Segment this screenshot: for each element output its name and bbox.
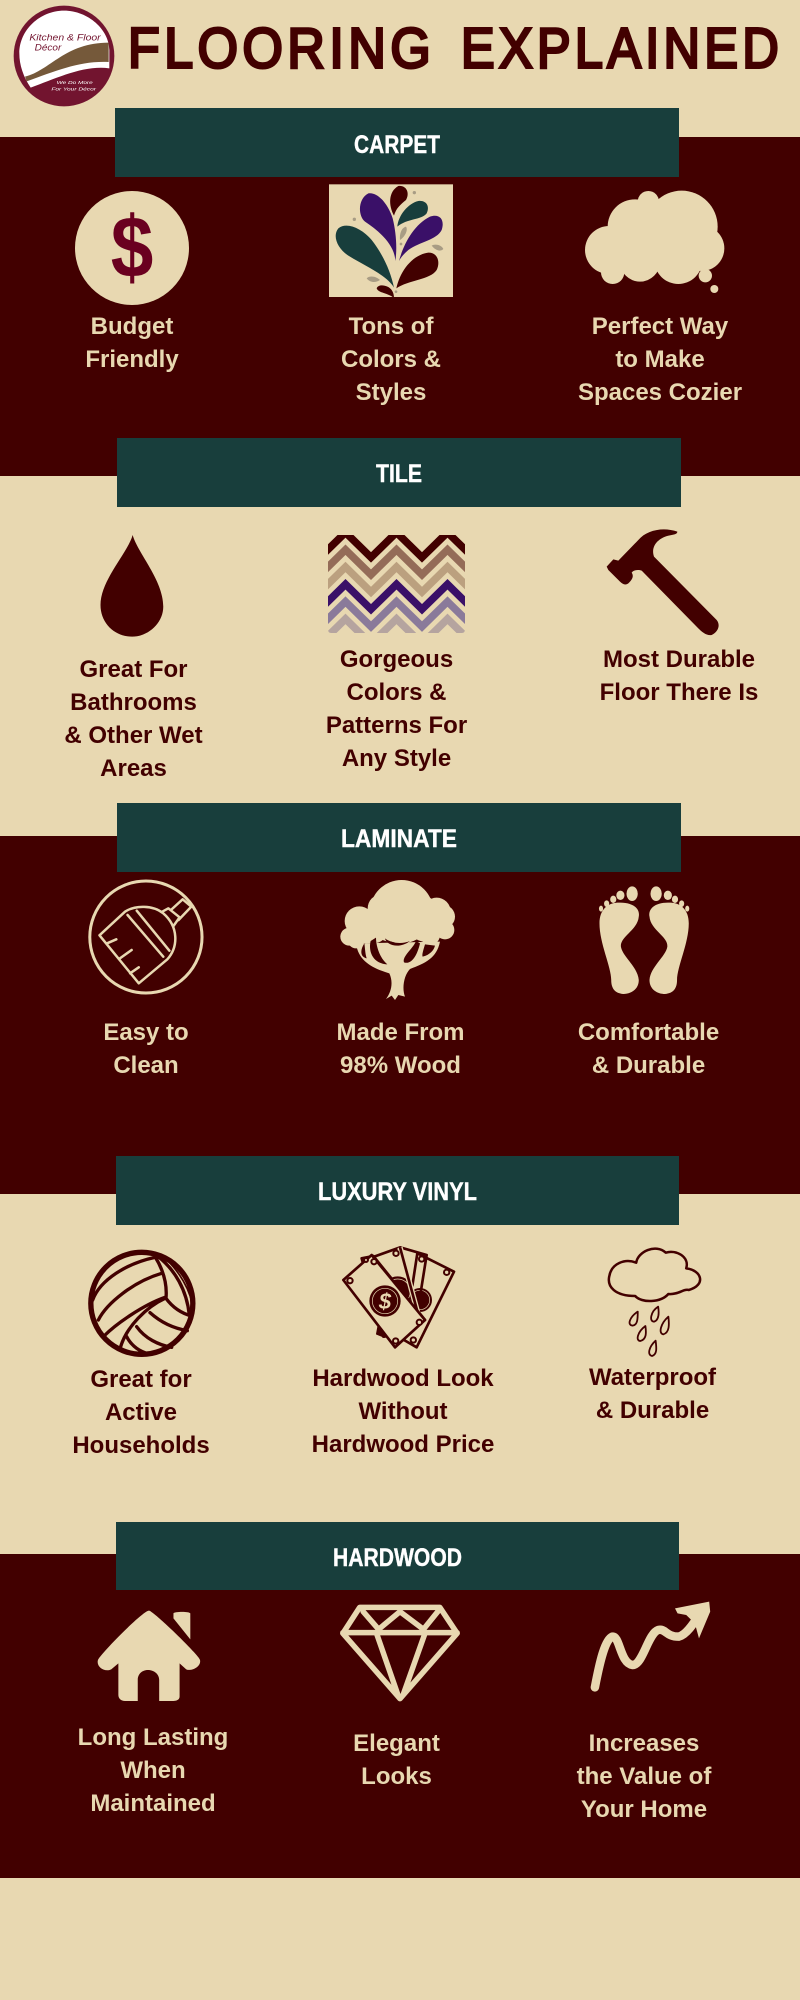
- label: colors and styles: Colors &: [341, 346, 441, 373]
- title: [128, 16, 783, 80]
- label: active households: Great for: [90, 1366, 192, 1393]
- label: elegant: Looks: [361, 1763, 432, 1790]
- logo: Kitchen & Floor Decor: Décor: [35, 43, 62, 53]
- heading: carpet: [115, 108, 679, 177]
- label: waterproof: & Durable: [596, 1397, 709, 1424]
- heading: laminate: [117, 803, 681, 872]
- label: wet areas: Areas: [100, 755, 167, 782]
- label: home value: the Value of: [577, 1763, 712, 1790]
- icon: fan of banknotes: [343, 1247, 454, 1347]
- icon: tree: [340, 880, 455, 1000]
- icon: rain cloud: [609, 1249, 700, 1356]
- icon: colour splash: [329, 184, 453, 298]
- icon: rising arrow: [595, 1602, 710, 1687]
- label: long lasting: Long Lasting: [78, 1724, 228, 1751]
- title: EXPLAINED: [461, 17, 783, 80]
- logo: Kitchen & Floor Decor: For Your Décor: [51, 86, 96, 92]
- label: wet areas: Great For: [79, 656, 188, 683]
- label: hardwood look: Hardwood Price: [312, 1431, 494, 1458]
- heading: hardwood: HARDWOOD: [333, 1544, 462, 1572]
- label: budget friendly: Budget: [91, 313, 173, 340]
- label: easy to clean: Clean: [113, 1052, 179, 1079]
- icon: hammer: [607, 529, 719, 635]
- heading: luxury vinyl: LUXURY VINYL: [318, 1178, 477, 1206]
- label: easy to clean: Easy to: [103, 1019, 189, 1046]
- heading: tile: TILE: [376, 460, 422, 488]
- label: home value: Increases: [589, 1730, 699, 1757]
- panel: hardwood: [0, 1522, 800, 1878]
- icon: broom in circle: [90, 881, 202, 993]
- heading: laminate: LAMINATE: [341, 825, 457, 853]
- icon: chevron tile pattern: [328, 535, 465, 633]
- heading: hardwood: [116, 1522, 679, 1590]
- panel: luxury vinyl: [72, 1156, 717, 1459]
- heading: luxury vinyl: [116, 1156, 679, 1225]
- label: patterns: Any Style: [342, 745, 451, 772]
- label: active households: Active: [105, 1399, 177, 1426]
- label: active households: Households: [72, 1432, 210, 1459]
- label: patterns: Gorgeous: [340, 646, 453, 673]
- label: budget friendly: Friendly: [85, 346, 179, 373]
- logo: Kitchen & Floor Decor: We Do More: [57, 80, 93, 86]
- label: cozier spaces: Spaces Cozier: [578, 379, 742, 406]
- label: colors and styles: Styles: [356, 379, 426, 406]
- heading: tile: [117, 438, 681, 507]
- icon: volleyball: [91, 1252, 193, 1354]
- icon: fan of banknotes: $: [378, 1289, 392, 1314]
- label: long lasting: When: [120, 1757, 186, 1784]
- logo: Kitchen & Floor Decor: [14, 6, 114, 106]
- icon: water drop: [101, 535, 163, 637]
- label: wood content: 98% Wood: [340, 1052, 461, 1079]
- icon: house: [98, 1611, 200, 1701]
- panel: laminate: [0, 803, 800, 1194]
- label: wet areas: & Other Wet: [64, 722, 203, 749]
- icon: dollar coin: $: [111, 199, 153, 296]
- label: elegant: Elegant: [353, 1730, 440, 1757]
- panel: carpet: [0, 108, 800, 476]
- label: comfortable: Comfortable: [578, 1019, 719, 1046]
- label: cozier spaces: Perfect Way: [592, 313, 729, 340]
- icon: diamond: [343, 1607, 457, 1699]
- label: hardwood look: Hardwood Look: [312, 1365, 494, 1392]
- label: long lasting: Maintained: [90, 1790, 216, 1817]
- label: colors and styles: Tons of: [349, 313, 434, 340]
- icon: dollar coin: [75, 191, 189, 305]
- panel: tile: [64, 438, 758, 782]
- label: waterproof: Waterproof: [589, 1364, 717, 1391]
- label: home value: Your Home: [581, 1796, 707, 1823]
- label: patterns: Colors &: [346, 679, 447, 706]
- heading: carpet: CARPET: [354, 131, 440, 159]
- label: durable: Most Durable: [603, 646, 755, 673]
- label: durable: Floor There Is: [600, 679, 758, 706]
- label: patterns: Patterns For: [326, 712, 467, 739]
- icon: thought cloud: [585, 191, 724, 293]
- label: comfortable: & Durable: [592, 1052, 705, 1079]
- label: cozier spaces: to Make: [615, 346, 705, 373]
- label: hardwood look: Without: [358, 1398, 448, 1425]
- label: wood content: Made From: [336, 1019, 465, 1046]
- label: wet areas: Bathrooms: [70, 689, 197, 716]
- logo: Kitchen & Floor Decor: Kitchen & Floor: [29, 33, 102, 43]
- title: FLOORING: [128, 16, 435, 80]
- icon: footprints: [599, 886, 689, 994]
